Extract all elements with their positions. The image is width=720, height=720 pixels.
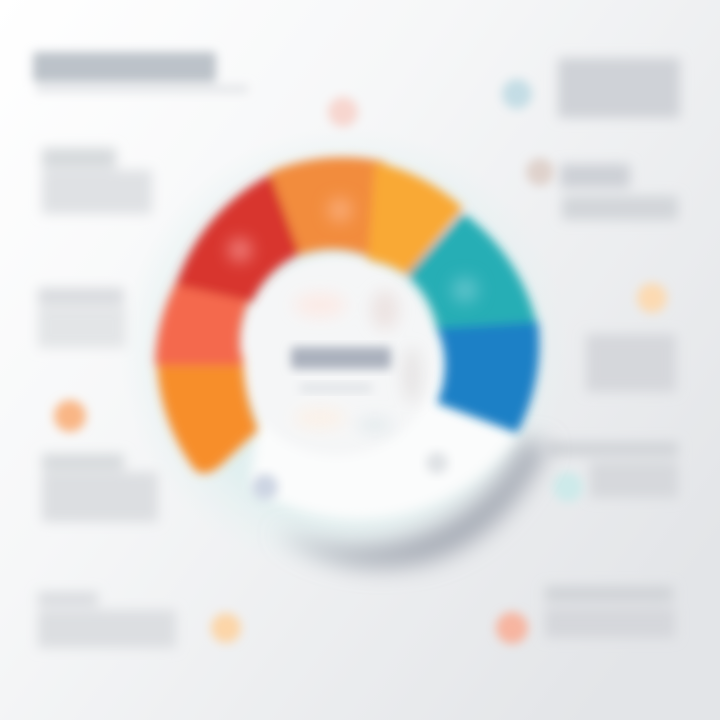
center tinted ring <box>294 290 421 433</box>
segment: teal <box>407 213 538 332</box>
segment: blue <box>437 322 539 433</box>
icon: white segment marker <box>426 452 448 474</box>
segment: orange <box>157 355 258 473</box>
donut chart <box>155 157 548 567</box>
left text block 3 <box>42 454 158 522</box>
coloured segments <box>155 157 539 473</box>
icon: lower right teal marker <box>553 472 583 502</box>
segment highlights <box>228 198 478 303</box>
icon: second right marker <box>526 158 554 186</box>
icon: bottom left orange marker <box>211 613 241 643</box>
segment: orange top <box>270 157 385 262</box>
title block <box>33 52 248 93</box>
right text block 1 <box>558 58 680 118</box>
left text block 2 <box>38 288 126 348</box>
right text block 5 <box>545 586 675 638</box>
icon: top marker <box>328 97 358 127</box>
icon: bottom right coral marker <box>496 612 528 644</box>
right text block 3 <box>586 334 676 392</box>
center heading <box>291 347 391 369</box>
center disc <box>237 256 437 456</box>
donut shadow <box>275 440 548 567</box>
right text block 4 <box>548 442 678 498</box>
left text block 4 <box>38 592 176 648</box>
segment: yellow <box>368 162 463 275</box>
segment: red <box>176 170 310 302</box>
icon: top right marker <box>502 79 532 109</box>
right text block 2 <box>560 164 678 220</box>
center content <box>291 290 421 433</box>
segment: coral <box>155 270 255 365</box>
icon: lower left blue marker <box>252 474 278 500</box>
white lower area <box>250 300 517 519</box>
icon: left orange marker <box>54 400 86 432</box>
center subheading <box>300 383 372 393</box>
icon: right orange marker <box>637 283 667 313</box>
left text block 1 <box>42 148 152 214</box>
